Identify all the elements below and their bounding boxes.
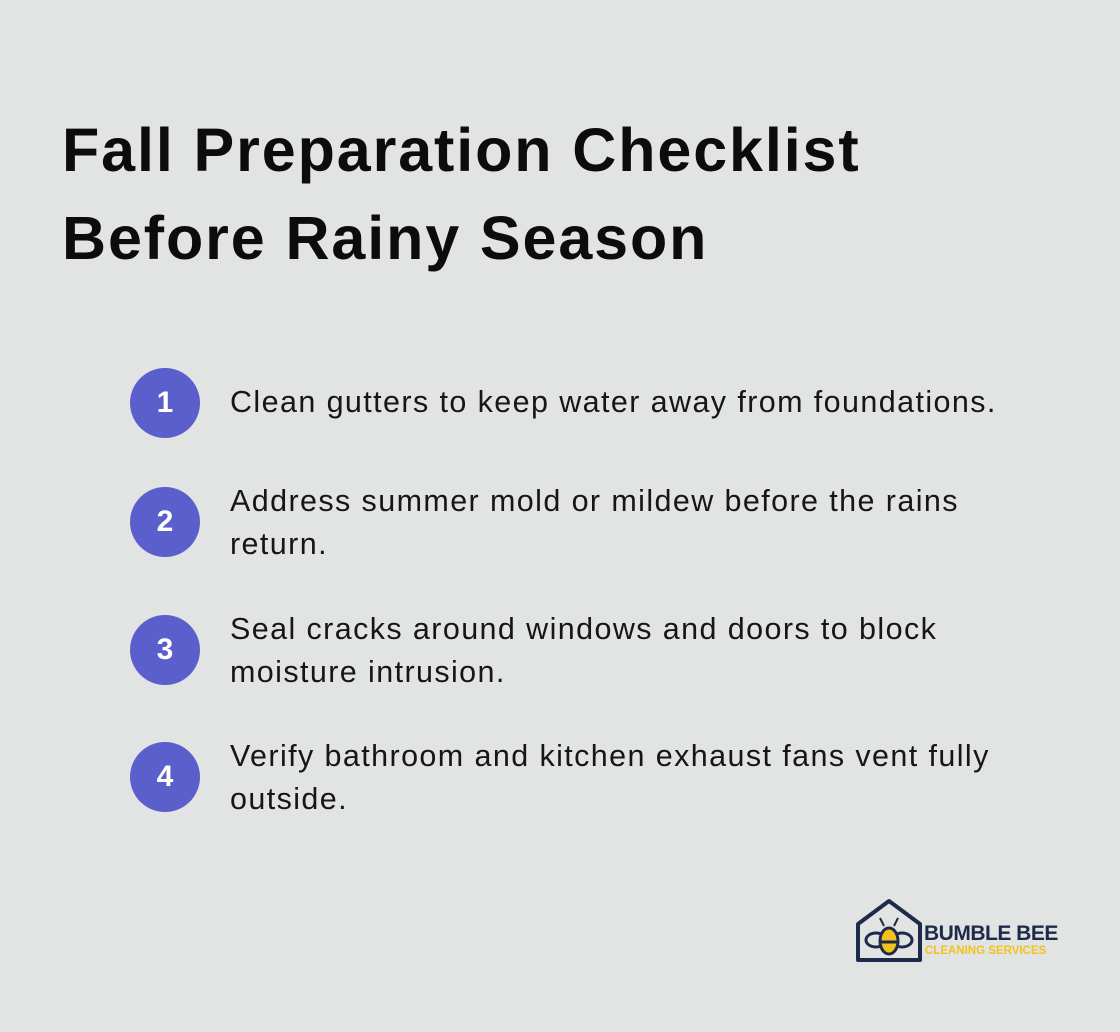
item 3 [130,612,937,689]
text 2: Address summer mold or mildew before the rains [230,484,959,518]
number 4: 4 [157,760,173,793]
logo text: BUMBLE BEE [924,922,1058,945]
number 1: 1 [157,386,173,419]
text 1: Clean gutters to keep water away from foundations. [230,385,997,419]
number 3 [130,615,200,685]
number 1 [130,368,200,438]
number 2: 2 [157,505,173,538]
text 2: return. [230,527,328,561]
text 4 [230,739,990,816]
icon: bee house [856,899,922,962]
title [62,116,861,272]
logo: CLEANING SERVICES [925,945,1046,957]
text 2 [230,484,959,561]
text 3: moisture intrusion. [230,655,506,689]
text 3: Seal cracks around windows and doors to block [230,612,937,646]
number 2 [130,487,200,557]
item 1 [130,368,997,438]
item 4 [130,739,990,816]
text 4: Verify bathroom and kitchen exhaust fans vent fully [230,739,990,773]
logo [856,899,1058,962]
number 4 [130,742,200,812]
text 3 [230,612,937,689]
title: Fall Preparation Checklist [62,116,861,184]
number 3: 3 [157,633,173,666]
item 2 [130,484,959,561]
text 4: outside. [230,782,348,816]
title: Before Rainy Season [62,204,708,272]
